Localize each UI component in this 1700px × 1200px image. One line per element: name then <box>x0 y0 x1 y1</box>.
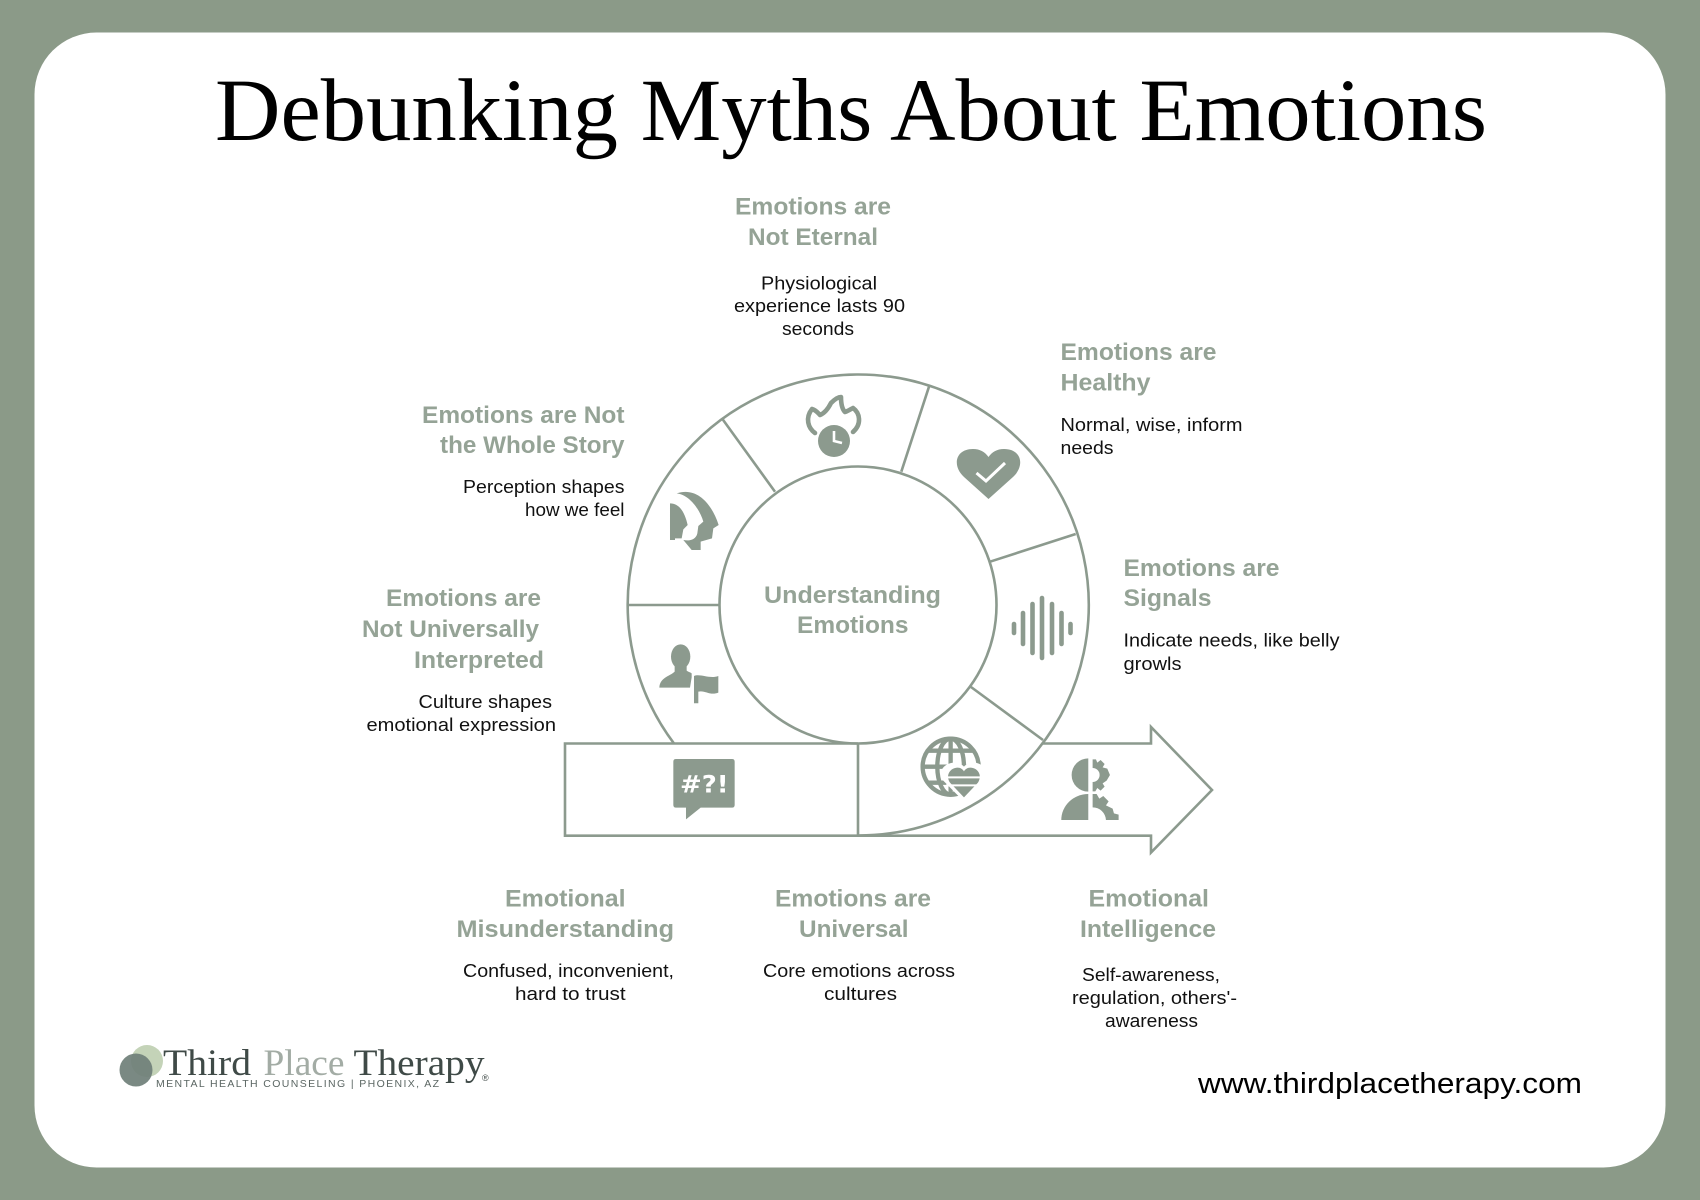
text: not the whole story: Emotions are Not <box>422 402 624 429</box>
text: emotional intelligence <box>1072 886 1237 1031</box>
icon: speech bubble with symbols <box>673 759 735 819</box>
text: emotions are healthy: needs <box>1060 438 1114 458</box>
ring outer arc <box>628 375 1089 836</box>
text: not the whole story: the Whole Story <box>440 432 625 459</box>
ring inner circle <box>720 466 996 744</box>
text: emotional intelligence: Emotional <box>1088 886 1209 912</box>
text: not universally interpreted: Culture shapes <box>418 692 552 712</box>
text: emotional intelligence: regulation, others'- <box>1072 988 1237 1008</box>
text: emotions are healthy <box>1060 339 1242 458</box>
center label: Understanding <box>764 582 941 609</box>
text: emotions are not eternal: Physiological <box>761 274 877 294</box>
logo: Third <box>163 1043 252 1084</box>
text: emotions are signals: Indicate needs, like belly <box>1124 630 1340 650</box>
text: emotions are signals: Emotions are <box>1124 555 1280 582</box>
diagram: ring and arrow <box>565 375 1212 852</box>
text: emotions are not eternal: Not Eternal <box>748 224 878 251</box>
center label <box>764 582 941 639</box>
text: emotions are universal: Core emotions across <box>763 961 955 981</box>
text: emotional intelligence: awareness <box>1105 1011 1198 1031</box>
website url: www.thirdplacetherapy.com <box>1197 1068 1582 1100</box>
center label: Emotions <box>797 612 908 639</box>
text: emotional intelligence: Self-awareness, <box>1082 965 1220 985</box>
text: emotional misunderstanding: Emotional <box>505 886 626 912</box>
text: emotional misunderstanding: Confused, inconvenient, <box>463 961 674 981</box>
text: not universally interpreted: emotional expression <box>366 715 556 735</box>
text: emotional misunderstanding: hard to trust <box>515 984 626 1004</box>
text: emotions are not eternal: seconds <box>782 319 854 339</box>
icon: speech bubble with symbols: #?! <box>680 771 729 799</box>
text: emotions are not eternal: experience lasts 90 <box>734 296 905 316</box>
icon: flame with clock <box>808 397 859 457</box>
text: emotions are healthy: Healthy <box>1060 369 1151 396</box>
text: emotions are signals: growls <box>1124 654 1182 674</box>
logo: ® <box>482 1073 489 1083</box>
text: emotions are healthy: Emotions are <box>1060 339 1216 366</box>
text: emotions are universal <box>763 886 955 1004</box>
text: emotions are universal: Universal <box>799 916 908 943</box>
text: emotions are healthy: Normal, wise, inform <box>1060 415 1242 435</box>
segment dividers <box>628 387 1076 836</box>
icon: globe with heart <box>923 739 986 802</box>
text: emotional misunderstanding <box>456 886 674 1004</box>
logo: MENTAL HEALTH COUNSELING | PHOENIX, AZ <box>156 1078 440 1090</box>
text: emotional intelligence: Intelligence <box>1080 916 1216 943</box>
arrow outline <box>565 727 1212 852</box>
text: not universally interpreted <box>362 585 556 735</box>
icon: two head silhouettes <box>670 492 719 550</box>
text: emotions are not eternal <box>734 194 905 339</box>
logo <box>120 1043 489 1090</box>
text: not universally interpreted: Emotions are <box>386 585 541 612</box>
text: emotions are universal: cultures <box>824 984 897 1004</box>
text: emotions are not eternal: Emotions are <box>735 194 891 221</box>
icon: person with gears <box>1061 758 1119 820</box>
text: emotional misunderstanding: Misunderstanding <box>456 916 674 943</box>
icon: sound wave <box>1014 598 1070 658</box>
logo: Place <box>264 1043 344 1084</box>
text: not the whole story: how we feel <box>525 500 624 520</box>
text: not universally interpreted: Not Universally <box>362 616 540 643</box>
text: not universally interpreted: Interpreted <box>414 647 544 674</box>
icon: heart with check <box>957 449 1020 499</box>
icon: person with flag <box>659 644 718 703</box>
logo: Therapy <box>354 1043 485 1084</box>
text: emotions are universal: Emotions are <box>775 886 931 912</box>
title: Debunking Myths About Emotions <box>215 62 1487 160</box>
text: emotions are signals <box>1124 555 1340 674</box>
text: emotions are signals: Signals <box>1124 585 1212 612</box>
text: not the whole story <box>422 402 625 520</box>
text: not the whole story: Perception shapes <box>463 477 624 497</box>
